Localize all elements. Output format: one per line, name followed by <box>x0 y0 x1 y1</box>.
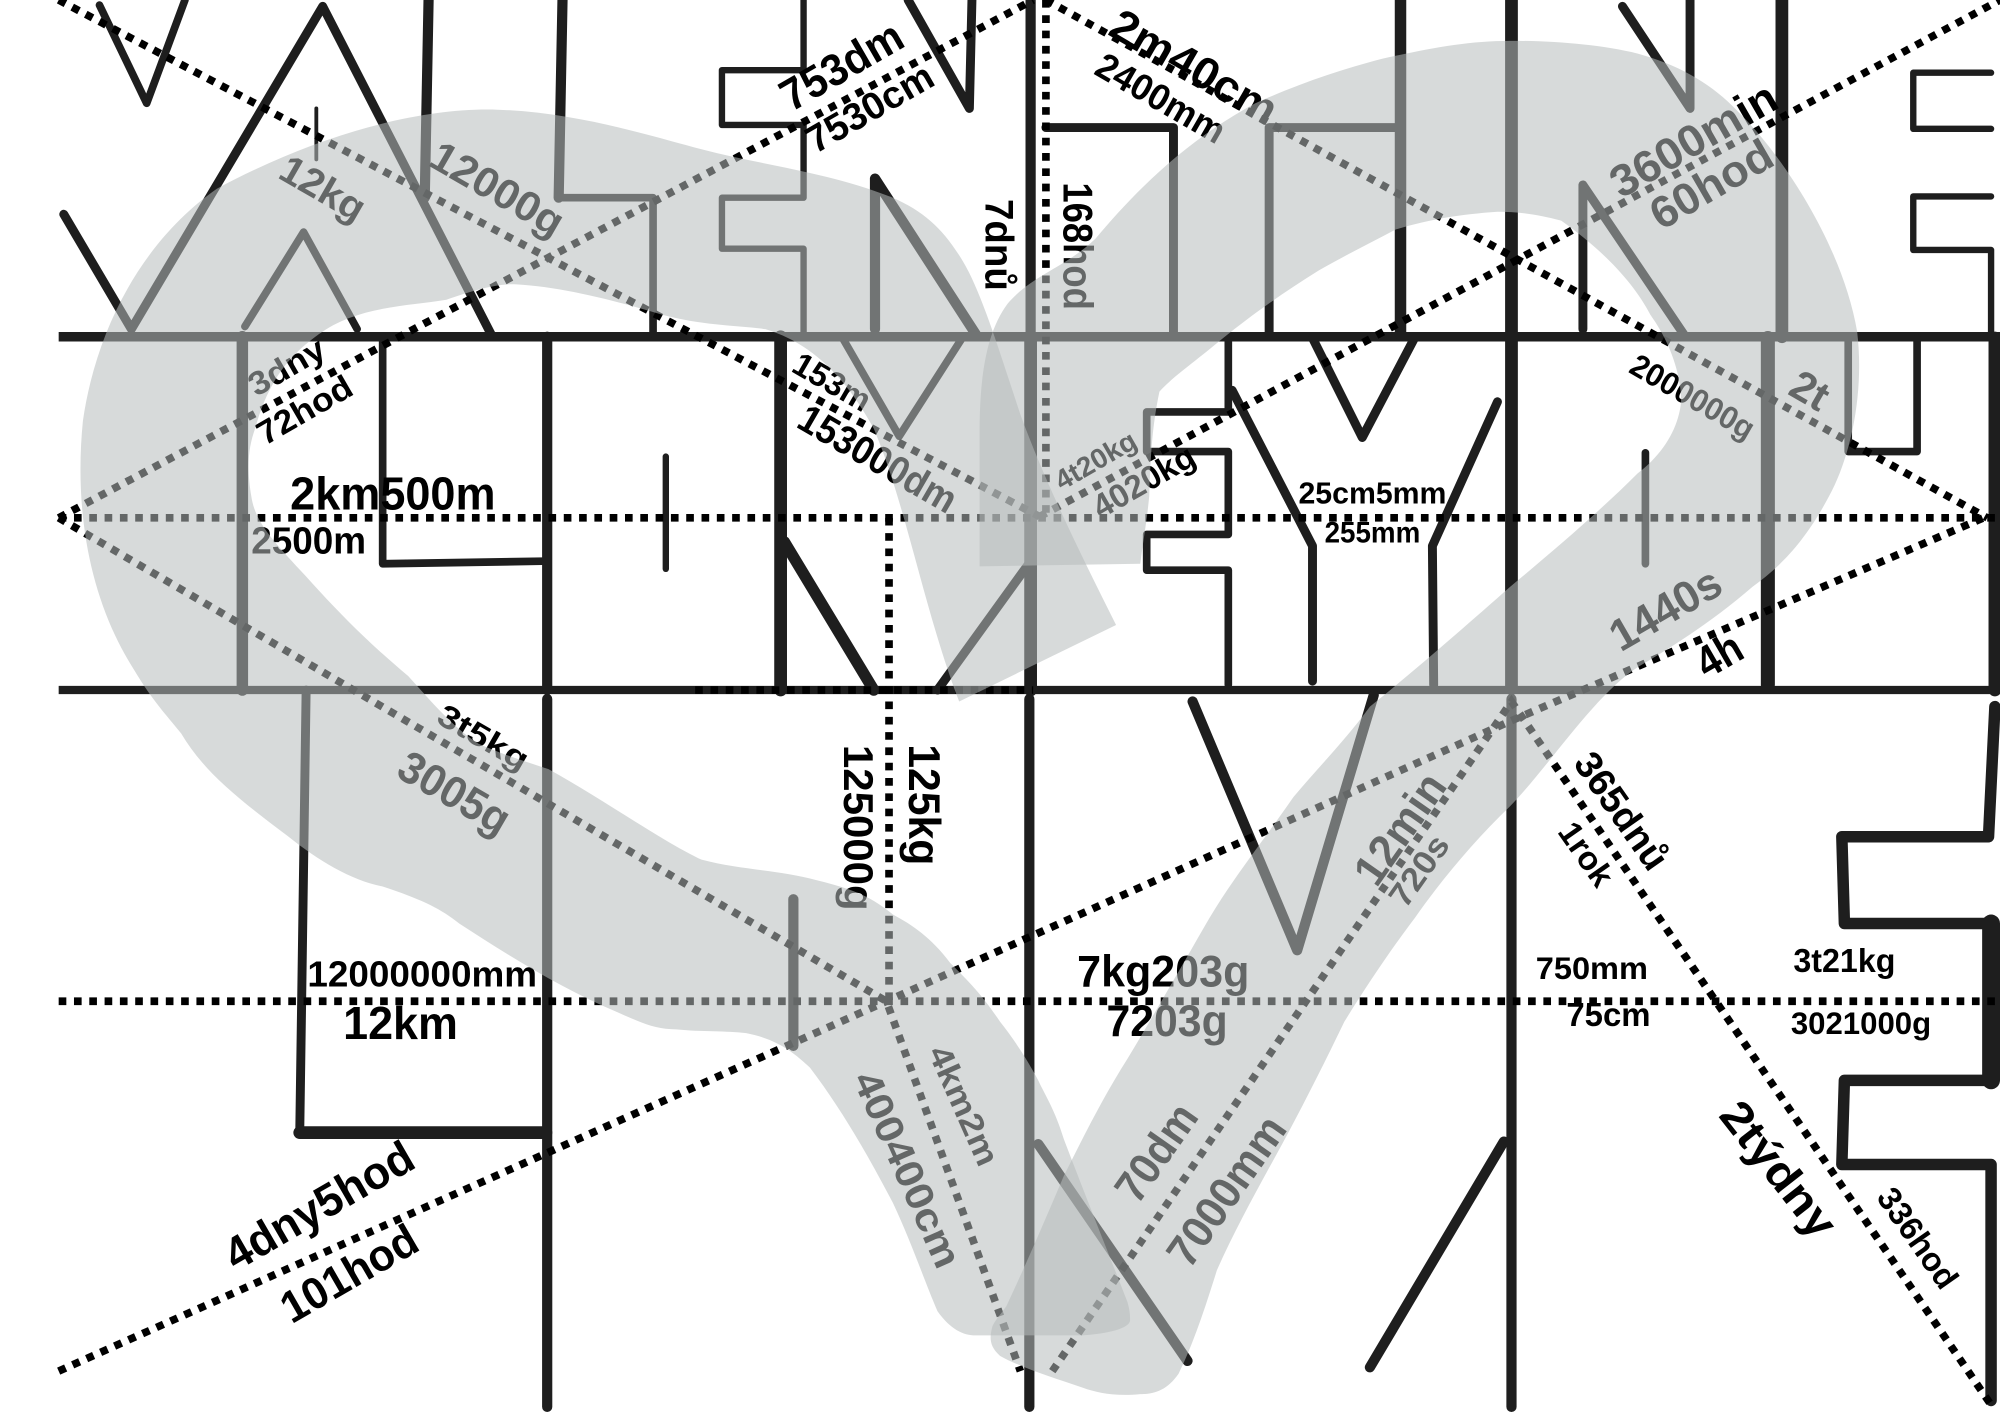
label 25cm5mm: 25cm5mm <box>1298 477 1446 511</box>
label 12000g: 12000g <box>422 132 573 246</box>
label 3t5kg: 3t5kg <box>431 697 535 778</box>
label 753dm: 753dm <box>772 12 912 121</box>
label 72hod: 72hod <box>250 369 359 453</box>
label 7203g: 7203g <box>1107 997 1228 1046</box>
label 60hod: 60hod <box>1641 130 1782 240</box>
label 7kg203g: 7kg203g <box>1077 947 1249 996</box>
label 3021000g: 3021000g <box>1791 1005 1931 1041</box>
label 3600min: 3600min <box>1602 73 1786 208</box>
label 12000000mm: 12000000mm <box>307 954 537 994</box>
label 1rok: 1rok <box>1550 815 1621 894</box>
label 2000000g: 2000000g <box>1624 347 1761 447</box>
label 3dny: 3dny <box>242 330 333 404</box>
label 4020kg: 4020kg <box>1086 438 1202 526</box>
label 255mm: 255mm <box>1325 517 1420 550</box>
label 2500m: 2500m <box>251 519 366 562</box>
label 2400mm: 2400mm <box>1089 45 1233 152</box>
label 125kg: 125kg <box>899 744 948 865</box>
horizontal rule bottom <box>59 687 2000 693</box>
label 750mm: 750mm <box>1536 950 1648 986</box>
label 101hod: 101hod <box>272 1215 427 1333</box>
label 3t21kg: 3t21kg <box>1793 943 1895 980</box>
label 336hod: 336hod <box>1869 1181 1965 1296</box>
label 12km: 12km <box>343 997 458 1049</box>
heart band: right half <box>980 41 1859 1395</box>
label 70dm: 70dm <box>1106 1095 1208 1211</box>
label 12kg: 12kg <box>272 147 373 231</box>
label 1440s: 1440s <box>1601 558 1731 661</box>
horizontal rule top <box>59 333 2000 340</box>
label 75cm: 75cm <box>1566 997 1651 1034</box>
label 2km500m: 2km500m <box>290 468 496 520</box>
letter row 2 <box>242 337 1995 690</box>
label 7000mm: 7000mm <box>1158 1107 1296 1276</box>
label 4t20kg: 4t20kg <box>1049 425 1142 496</box>
label 12min: 12min <box>1345 764 1456 894</box>
label 125000g: 125000g <box>835 745 882 911</box>
label 2m40cm: 2m40cm <box>1102 0 1286 135</box>
label 153000dm: 153000dm <box>790 396 965 522</box>
label 4km2m: 4km2m <box>920 1040 1006 1172</box>
label 153m: 153m <box>786 346 877 420</box>
label 400400cm: 400400cm <box>844 1065 970 1275</box>
label 7dnů: 7dnů <box>977 199 1021 291</box>
label 2t: 2t <box>1782 361 1838 420</box>
label 365dnů: 365dnů <box>1565 744 1677 878</box>
label 168hod: 168hod <box>1054 182 1101 310</box>
heart band: left half <box>80 110 1130 1335</box>
label 3005g: 3005g <box>389 742 519 845</box>
label 2týdny: 2týdny <box>1710 1092 1847 1248</box>
letter row 1 <box>64 0 1991 689</box>
label 4h: 4h <box>1687 623 1752 688</box>
label 7530cm: 7530cm <box>798 55 941 162</box>
label 720s: 720s <box>1382 828 1457 914</box>
label 4dny5hod: 4dny5hod <box>215 1130 423 1280</box>
letter row 3 <box>300 690 1995 1407</box>
